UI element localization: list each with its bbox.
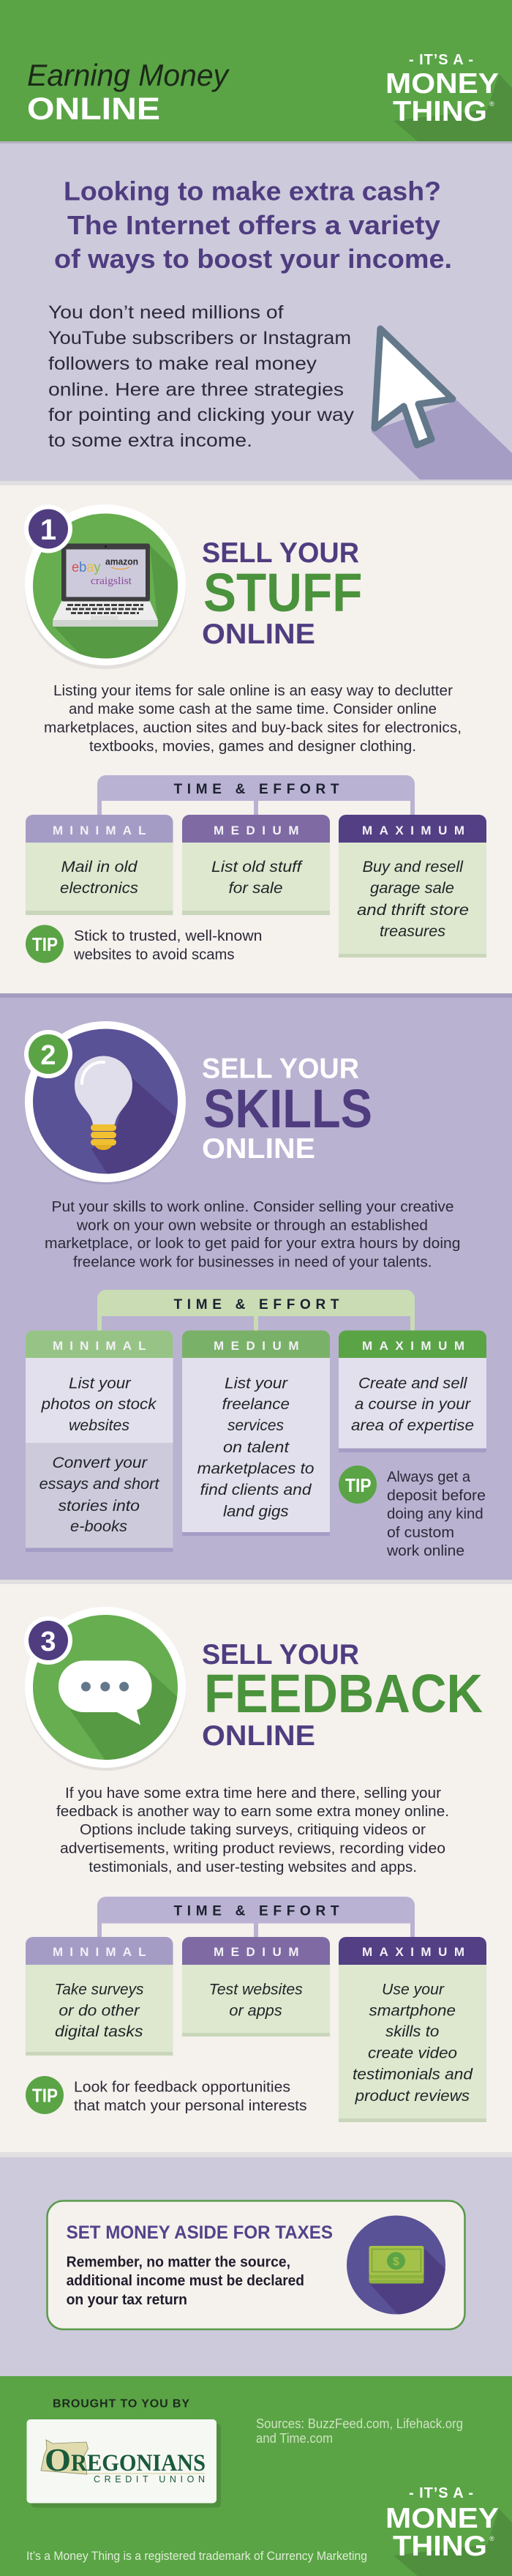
paragraph: If you have some extra time here and there, selling your (65, 1785, 441, 1802)
column: maximum: testimonials and (353, 2066, 473, 2083)
column: minimal: MINIMAL (53, 1945, 146, 1959)
sponsor logo card: REGONIANS (71, 2450, 206, 2476)
tip (339, 1466, 486, 1559)
intro headline (54, 176, 452, 274)
column: maximum: Use your (382, 1982, 445, 1998)
heading: sell your stuff online (202, 537, 363, 650)
panel: taxes (0, 2157, 512, 2376)
intro body text: to some extra income. (48, 430, 252, 451)
column: minimal: List your (69, 1375, 132, 1392)
tip: websites to avoid scams (73, 947, 234, 963)
sponsor logo card (26, 2419, 221, 2508)
callout: set money aside for taxes: Remember, no matter the source, (67, 2255, 290, 2271)
column: medium: MEDIUM (214, 1339, 298, 1353)
badge: number 3 (24, 1616, 72, 1665)
callout: set money aside for taxes: additional income must be declared (67, 2273, 304, 2289)
logo: It's a Money Thing: ® (489, 100, 494, 108)
paragraph (45, 1199, 461, 1271)
tip: deposit before (387, 1487, 486, 1504)
icon: stack of money: $ (393, 2256, 399, 2268)
intro body text: followers to make real money (48, 354, 317, 374)
column: minimal: Convert your (52, 1455, 148, 1471)
icon: light bulb in purple circle (25, 1021, 186, 1184)
time and effort bracket: TIME & EFFORT (174, 1297, 339, 1313)
column: maximum: area of expertise (351, 1417, 474, 1434)
column: maximum (339, 815, 486, 957)
time and effort bracket: TIME & EFFORT (174, 1904, 339, 1919)
column: medium: services (227, 1417, 284, 1434)
intro headline: of ways to boost your income. (54, 244, 452, 274)
trademark notice: It’s a Money Thing is a registered trademark of Currency Marketing (26, 2549, 367, 2563)
badge: number 2: 2 (40, 1040, 56, 1071)
column: medium: freelance (222, 1396, 290, 1413)
callout: set money aside for taxes: on your tax return (67, 2292, 187, 2308)
column: medium: MEDIUM (214, 824, 298, 837)
column: medium (182, 815, 330, 915)
icon: laptop in green circle: amazon (105, 556, 138, 567)
column: minimal (26, 1331, 173, 1552)
badge: number 1: 1 (40, 514, 56, 546)
intro body text: You don’t need millions of (48, 302, 284, 323)
heading: sell your skills online: SKILLS (203, 1078, 372, 1139)
column: medium: land gigs (223, 1504, 289, 1520)
column: medium: List old stuff (211, 859, 303, 876)
tip: work online (386, 1543, 464, 1559)
column: maximum (339, 1331, 486, 1452)
sponsor logo card: O (45, 2442, 71, 2478)
tip: TIP (345, 1474, 372, 1496)
column: maximum: MAXIMUM (362, 1339, 464, 1353)
paragraph: marketplaces, auction sites and buy-back sites for electronics, (44, 720, 462, 736)
column: medium (182, 1331, 330, 1536)
logo: It's a Money Thing: MONEY (385, 2503, 499, 2534)
sponsor logo card: CREDIT UNION (94, 2474, 205, 2484)
column: maximum: product reviews (355, 2088, 470, 2105)
tip: Look for feedback opportunities (74, 2079, 290, 2095)
badge: number 3: 3 (40, 1627, 56, 1657)
heading: sell your skills online (202, 1053, 372, 1165)
time and effort bracket (97, 1290, 415, 1331)
icon: laptop in green circle: ebay (72, 560, 101, 575)
title: Earning Money (27, 58, 230, 92)
time and effort bracket (97, 775, 415, 815)
paragraph: advertisements, writing product reviews, recording video (60, 1841, 445, 1857)
column: maximum: MAXIMUM (362, 1945, 464, 1959)
time and effort bracket: TIME & EFFORT (174, 782, 339, 797)
time and effort bracket (97, 1897, 415, 1937)
column: minimal: e-books (70, 1518, 128, 1535)
column: minimal: digital tasks (55, 2023, 143, 2040)
callout: set money aside for taxes: SET MONEY ASIDE FOR TAXES (67, 2222, 333, 2243)
heading: sell your feedback online (202, 1639, 483, 1752)
panel: section 2 sell your skills (0, 998, 512, 1580)
heading: sell your feedback online: SELL YOUR (202, 1639, 359, 1670)
paragraph (44, 683, 462, 755)
icon: mouse cursor (371, 329, 512, 479)
column: maximum: Create and sell (358, 1375, 468, 1392)
column: medium: find clients and (200, 1482, 312, 1498)
title: ONLINE (27, 92, 160, 127)
column: medium: for sale (228, 880, 282, 897)
title (27, 58, 230, 127)
paragraph: textbooks, movies, games and designer clothing. (89, 739, 416, 755)
column: medium: on talent (223, 1439, 290, 1456)
paragraph: feedback is another way to earn some extra money online. (56, 1804, 449, 1820)
column: maximum: smartphone (369, 2003, 456, 2019)
tip (26, 925, 262, 963)
intro body text: YouTube subscribers or Instagram (48, 328, 351, 348)
column: medium (182, 1937, 330, 2036)
column: minimal (26, 1937, 173, 2056)
logo: It's a Money Thing: THING (393, 96, 487, 127)
panel: header (0, 0, 512, 143)
panel: intro (0, 143, 512, 481)
column: maximum: a course in your (355, 1396, 471, 1413)
column: maximum: skills to (385, 2023, 440, 2040)
column: minimal: electronics (60, 880, 139, 897)
paragraph: marketplace, or look to get paid for your extra hours by doing (45, 1236, 461, 1252)
column: minimal: Mail in old (61, 859, 138, 876)
intro body text: online. Here are three strategies (48, 379, 344, 400)
column: maximum: Buy and resell (363, 859, 464, 876)
tip: TIP (32, 933, 58, 955)
logo: It's a Money Thing: ® (489, 2535, 494, 2542)
column: minimal: MINIMAL (53, 824, 146, 837)
column: minimal: stories into (59, 1498, 140, 1515)
column: minimal: websites (69, 1417, 130, 1434)
logo: It's a Money Thing: - IT’S A - (409, 52, 473, 68)
heading: sell your skills online: SELL YOUR (202, 1053, 359, 1085)
sources: and Time.com (256, 2431, 333, 2446)
column: minimal: essays and short (39, 1476, 160, 1493)
column: medium: List your (225, 1375, 288, 1392)
heading: sell your feedback online: FEEDBACK (204, 1663, 483, 1724)
column: minimal: Take surveys (54, 1982, 144, 1998)
column: maximum: treasures (380, 923, 446, 940)
badge: number 1 (24, 505, 72, 553)
tip: that match your personal interests (74, 2098, 307, 2114)
heading: sell your stuff online: SELL YOUR (202, 537, 359, 569)
logo: It's a Money Thing: MONEY (385, 68, 499, 100)
column: medium: Test websites (209, 1982, 303, 1998)
intro body text: for pointing and clicking your way (48, 405, 355, 425)
sources (256, 2416, 463, 2446)
heading: sell your stuff online: STUFF (203, 562, 363, 623)
tip: TIP (32, 2085, 58, 2107)
column: medium: or apps (229, 2003, 282, 2019)
logo: It's a Money Thing: THING (393, 2531, 487, 2562)
sponsor label: BROUGHT TO YOU BY (53, 2398, 189, 2411)
sources: Sources: BuzzFeed.com, Lifehack.org (256, 2416, 463, 2431)
icon: laptop in green circle (25, 504, 186, 669)
panel: section 1 sell your stuff (24, 504, 486, 963)
column: minimal: photos on stock (41, 1396, 157, 1413)
tip: Always get a (387, 1469, 471, 1485)
badge: number 2 (24, 1030, 72, 1078)
column: maximum: create video (368, 2045, 457, 2062)
intro headline: The Internet offers a variety (67, 210, 440, 240)
logo: It's a Money Thing (385, 52, 512, 141)
tip: doing any kind (387, 1507, 483, 1523)
icon: laptop in green circle: craigslist (91, 575, 132, 587)
column: minimal: MINIMAL (53, 1339, 146, 1353)
paragraph: Listing your items for sale online is an easy way to declutter (53, 683, 453, 699)
column: maximum: MAXIMUM (362, 824, 464, 837)
paragraph: testimonials, and user-testing websites and apps. (89, 1859, 417, 1875)
column: maximum (339, 1937, 486, 2122)
column: minimal: or do other (59, 2003, 140, 2019)
tip: Stick to trusted, well-known (74, 928, 262, 944)
callout: set money aside for taxes (47, 2200, 465, 2329)
intro body text (48, 302, 355, 451)
heading: sell your feedback online: ONLINE (202, 1720, 315, 1752)
column: medium: MEDIUM (214, 1945, 298, 1959)
column: medium: marketplaces to (197, 1460, 315, 1477)
paragraph (56, 1785, 449, 1875)
panel: section 3 sell your feedback (24, 1607, 486, 2122)
heading: sell your stuff online: ONLINE (202, 619, 315, 650)
paragraph: Put your skills to work online. Consider selling your creative (51, 1199, 453, 1215)
tip (26, 2076, 307, 2114)
paragraph: freelance work for businesses in need of your talents. (73, 1255, 432, 1271)
icon: speech bubble in green circle (25, 1607, 186, 1771)
tip: of custom (387, 1525, 454, 1541)
column: maximum: and thrift store (357, 902, 469, 919)
paragraph: and make some cash at the same time. Consider online (69, 701, 437, 717)
icon: stack of money (347, 2215, 445, 2315)
intro headline: Looking to make extra cash? (64, 176, 441, 206)
panel: footer (0, 2376, 512, 2576)
column: minimal (26, 815, 173, 915)
paragraph: Options include taking surveys, critiquing videos or (80, 1822, 426, 1838)
paragraph: work on your own website or through an established (76, 1218, 428, 1234)
heading: sell your skills online: ONLINE (202, 1133, 315, 1165)
logo: It's a Money Thing: - IT’S A - (409, 2485, 473, 2501)
logo: It's a Money Thing (385, 2485, 512, 2576)
column: maximum: garage sale (370, 880, 454, 897)
